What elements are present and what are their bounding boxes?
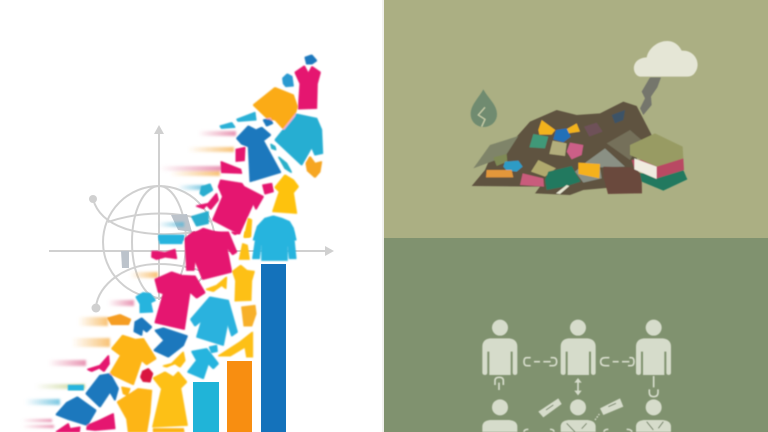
arrows between people [495, 358, 658, 432]
chart: globe and axes [49, 125, 334, 312]
people circular-economy diagram [482, 320, 671, 432]
landfill pile illustration [471, 41, 698, 195]
person: bottom middle, cracked [561, 399, 596, 432]
person: top right [636, 320, 671, 375]
chart: rising clothing silhouettes, lower part [56, 232, 296, 432]
person: bottom left [482, 399, 517, 432]
icon: water drop [471, 89, 497, 127]
stack of folded clothes [630, 133, 687, 191]
panel: white background [0, 0, 384, 432]
brown box [603, 167, 642, 194]
rubbish mound [472, 102, 652, 195]
person: top left [482, 320, 517, 375]
clothing scraps [486, 120, 625, 194]
smoke [640, 77, 661, 115]
broken links [538, 398, 562, 417]
bar chart: three rising bars [193, 264, 286, 432]
panel edge line [382, 0, 384, 432]
panel: circular people background [384, 238, 768, 432]
person: bottom right, cracked [636, 399, 671, 432]
icon: cloud [634, 41, 698, 77]
chart: rising clothing silhouettes, upper part [159, 55, 323, 240]
motion streaks [22, 131, 236, 428]
panel: landfill background [384, 0, 768, 238]
person: top middle [561, 320, 596, 375]
